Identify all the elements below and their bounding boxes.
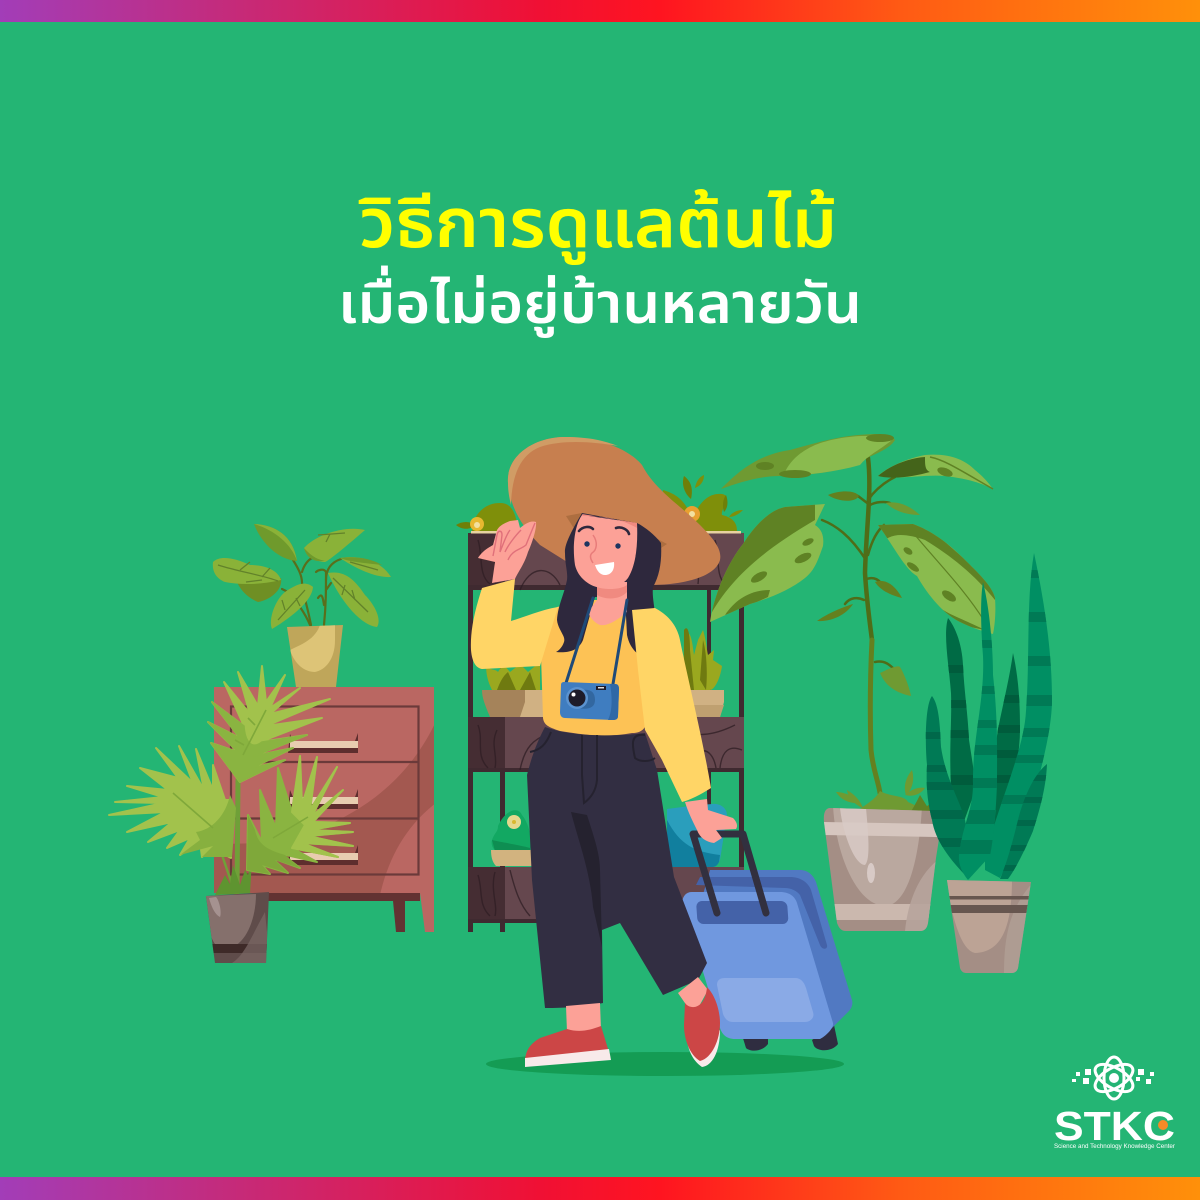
wheels — [742, 1025, 838, 1051]
top frond — [208, 666, 330, 782]
title — [338, 175, 862, 349]
small stone pot — [945, 878, 1035, 973]
right sleeve — [632, 608, 711, 802]
suitcase back — [700, 870, 852, 1035]
logo caption: Science and Technology Knowledge Center — [1054, 1144, 1175, 1150]
character — [471, 437, 737, 1067]
left leaf — [926, 696, 966, 874]
lower-shelf plant — [491, 810, 535, 866]
big right leaf — [875, 520, 1000, 634]
top-left leaf — [721, 434, 895, 489]
soil grass — [836, 770, 940, 813]
top gradient bar — [0, 0, 1200, 22]
front pocket — [717, 978, 813, 1022]
right frond — [247, 756, 353, 874]
snake plant — [925, 553, 1060, 973]
drawer handles — [288, 733, 358, 865]
telescopic handle — [693, 834, 766, 913]
small stem leaves — [817, 491, 920, 696]
large leafy plant — [700, 434, 1000, 931]
face — [574, 514, 637, 588]
back leaves — [946, 618, 1020, 826]
drawers — [231, 706, 418, 874]
grass at pot — [215, 860, 252, 895]
STKC logo — [1054, 1057, 1175, 1150]
left sleeve — [471, 579, 558, 669]
suitcase — [682, 834, 852, 1051]
data pixels — [1072, 1069, 1154, 1084]
left frond — [109, 746, 236, 858]
main stem — [822, 458, 895, 793]
tall right leaf — [985, 554, 1052, 878]
small right leaf — [1000, 764, 1050, 879]
tan pot — [287, 622, 343, 687]
atom emblem — [1091, 1057, 1137, 1099]
shelf with plants — [456, 475, 744, 932]
plant on dresser — [213, 524, 391, 687]
dresser — [214, 687, 440, 932]
logo orange dot — [1158, 1120, 1168, 1130]
hat — [508, 437, 720, 585]
gripping hand — [685, 799, 737, 843]
middle-shelf plants — [482, 628, 724, 717]
logo wordmark: STKC — [1054, 1103, 1175, 1149]
hair — [556, 513, 661, 659]
top-shelf bushes — [456, 475, 743, 531]
watering can — [667, 804, 727, 867]
left leg and shoe — [525, 1003, 611, 1067]
shelf posts — [468, 533, 744, 932]
ground shadow — [486, 1052, 844, 1076]
grey palm pot — [206, 892, 270, 963]
camera straps — [566, 598, 627, 684]
shelf boards — [468, 531, 744, 923]
palm stems — [222, 780, 238, 893]
palm plant — [109, 666, 353, 963]
title: วิธีการดูแลต้นไม้ — [358, 175, 837, 279]
title: เมื่อไม่อยู่บ้านหลายวัน — [338, 265, 862, 349]
dresser base and leg — [262, 893, 420, 932]
neck shadow — [597, 585, 627, 598]
centre leaf — [959, 582, 998, 880]
neck — [588, 582, 627, 625]
right leg and shoe — [678, 977, 720, 1067]
camera — [560, 682, 619, 720]
bottom gradient bar — [0, 1177, 1200, 1200]
suitcase front — [682, 892, 833, 1039]
sweater body — [541, 600, 655, 735]
raised hand — [478, 520, 536, 583]
suitcase groove — [696, 877, 827, 949]
handle plate — [696, 901, 789, 924]
large stone pot — [820, 805, 945, 931]
top-right leaf — [878, 455, 993, 489]
big left leaf — [710, 504, 825, 622]
pants — [527, 727, 707, 1008]
